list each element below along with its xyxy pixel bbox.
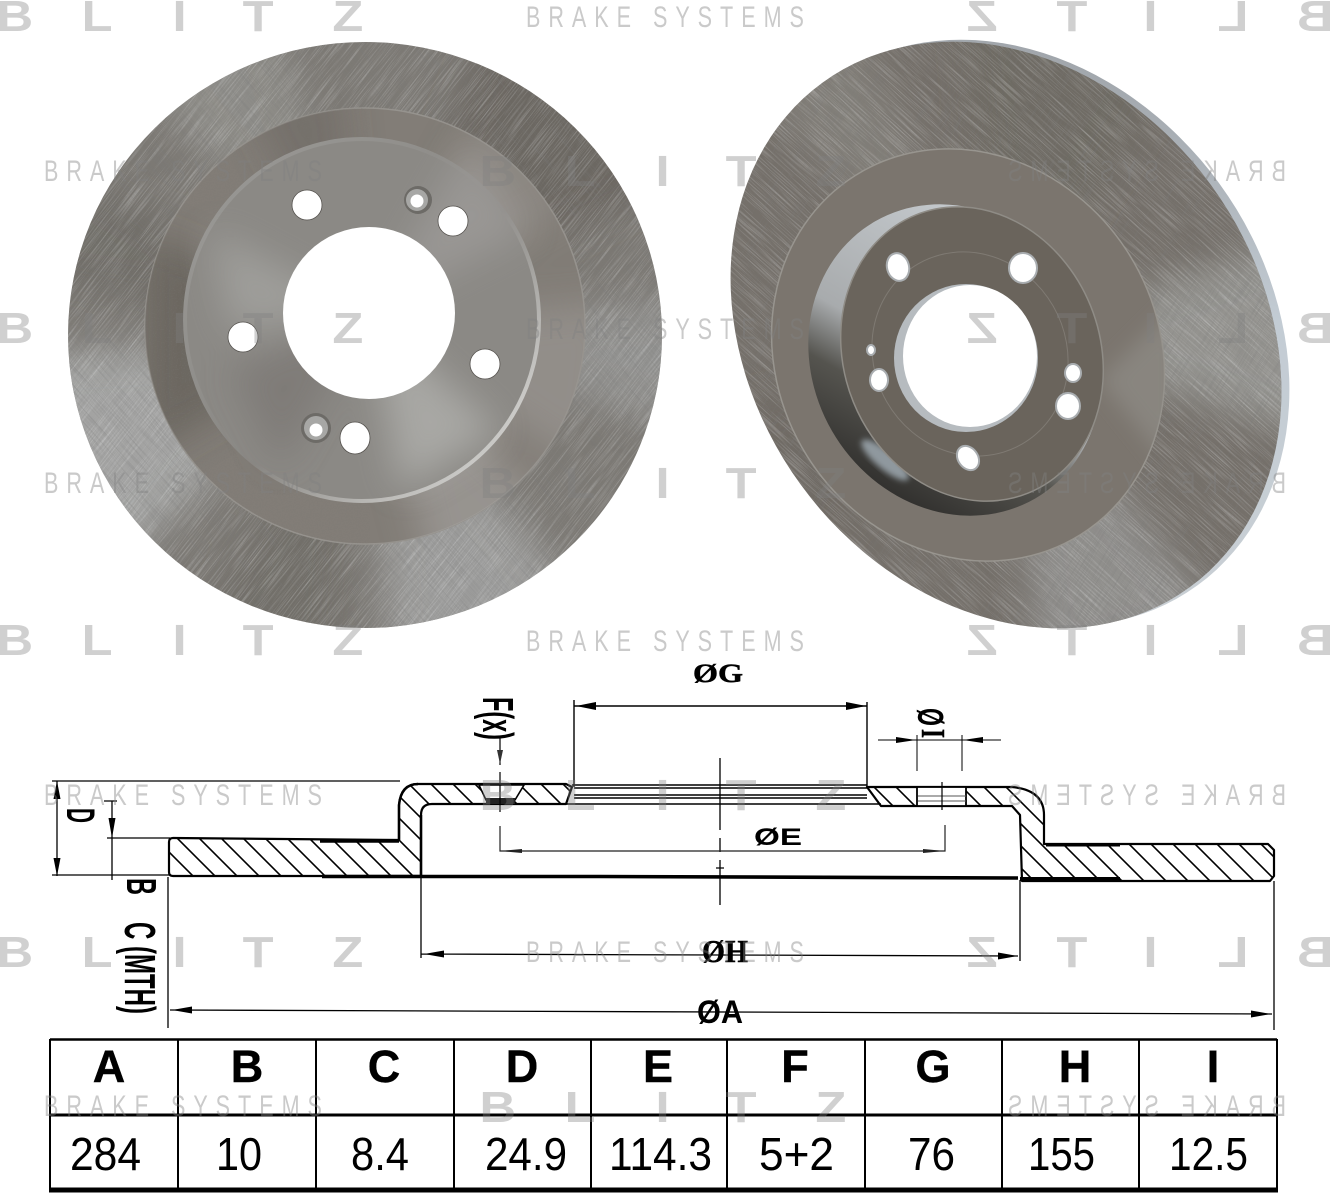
label diameter H: ØH [702,933,748,969]
watermark row y170: BRAKE SYSTEMS [1008,153,1286,188]
mounting hole section [917,782,966,810]
table values: 8.4 [351,1128,409,1180]
photo: brake disc front view [68,42,662,628]
table values: 76 [908,1128,955,1180]
table values: 5+2 [759,1128,834,1180]
technical drawing: disc cross-section [52,659,1274,1030]
watermark row y640: BRAKE SYSTEMS [526,623,804,658]
centre bore with bevel [894,284,1038,432]
watermark row y1105: BLITZ [480,1083,846,1132]
label diameter A: ØA [697,994,743,1030]
watermark row y482: BLITZ [480,459,846,508]
watermark row y952 [0,928,1330,977]
dimension D and B [52,781,400,1014]
watermark row y170: BRAKE SYSTEMS [44,153,322,188]
centre line [716,758,724,905]
table header letters [93,1041,1219,1092]
bolt holes [228,190,500,454]
watermark row y482: BRAKE SYSTEMS [1008,465,1286,500]
table values: 155 [1028,1128,1095,1180]
watermark row y794: BRAKE SYSTEMS [1008,777,1286,812]
watermark row y328: BRAKE SYSTEMS [526,311,804,346]
friction surface baseline [322,876,1018,878]
dimension H [421,876,1020,969]
table header letters: F [781,1041,809,1092]
dimension F(x): F(x) [473,697,522,740]
watermark row y794: BRAKE SYSTEMS [44,777,322,812]
bolt and screw holes [867,251,1081,474]
watermark row y1105 [44,1083,1286,1132]
photo: brake disc rear three-quarter view [730,40,1290,628]
table header letters: I [1207,1041,1219,1092]
hat section inner flat [185,139,539,501]
table grid [49,1039,1278,1190]
dimensions table [49,1039,1278,1190]
dimension I: I [914,729,951,738]
watermark row y170: BLITZ [480,147,846,196]
hat section [695,75,1241,635]
watermark row y640 [0,616,1330,665]
table values: 12.5 [1169,1128,1248,1180]
right flange and hat profile [867,787,1274,881]
table header letters: E [643,1041,673,1092]
watermark row y640: BLITZ [967,616,1330,665]
watermark row y170 [44,147,1286,196]
table header letters: G [915,1041,951,1092]
label C (MTH): C (MTH) [115,922,164,1014]
watermark row y482 [44,459,1286,508]
hat section outer ring [145,108,585,544]
watermark row y328: BLITZ [0,304,363,353]
brushed surface sheen [68,42,662,628]
watermark row y16 [0,0,1330,41]
watermark row y952: BRAKE SYSTEMS [526,934,804,969]
table header letters: B [231,1041,263,1092]
watermark row y794: BLITZ [480,771,846,820]
dimension A [168,877,1274,1030]
table values: 284 [70,1128,141,1180]
table header letters: H [1059,1041,1091,1092]
brushed surface sheen [730,42,1282,628]
table values: 10 [216,1128,262,1180]
disc friction face [617,0,1330,737]
watermark row y794 [44,771,1286,820]
table values: 24.9 [485,1128,567,1180]
table header letters: D [506,1041,538,1092]
central plate lines [566,785,881,804]
table values [70,1128,1248,1180]
bright disc rim [625,0,1330,735]
dimension G [574,659,867,787]
watermark row y328: BLITZ [967,304,1330,353]
centre bore [283,227,455,399]
watermark row y952: BLITZ [967,928,1330,977]
watermark row y1105: BRAKE SYSTEMS [44,1088,322,1123]
dimension E [500,824,945,853]
watermark row y482: BRAKE SYSTEMS [44,465,322,500]
watermark row y640: BLITZ [0,616,363,665]
hat recess bowl [752,150,1158,570]
label diameter G: ØG [693,659,743,688]
label diameter E: ØE [754,824,802,851]
disc friction face [68,42,662,628]
watermark row y1105: BRAKE SYSTEMS [1008,1088,1286,1123]
dimension I [878,708,1001,771]
table values: 114.3 [609,1128,712,1180]
bolt hole counterbore [479,772,524,812]
left flange and hat profile [169,784,572,876]
label diameter I: Ø [910,708,951,726]
table header letters: C [368,1041,400,1092]
watermark row y952: BLITZ [0,928,363,977]
watermark row y16: BRAKE SYSTEMS [526,0,804,34]
countersunk screw holes [301,186,432,443]
label B: B [118,878,165,895]
table header letters: A [93,1041,125,1092]
label D: D [58,808,102,823]
watermark row y328 [0,304,1330,353]
recess floor [797,167,1147,541]
